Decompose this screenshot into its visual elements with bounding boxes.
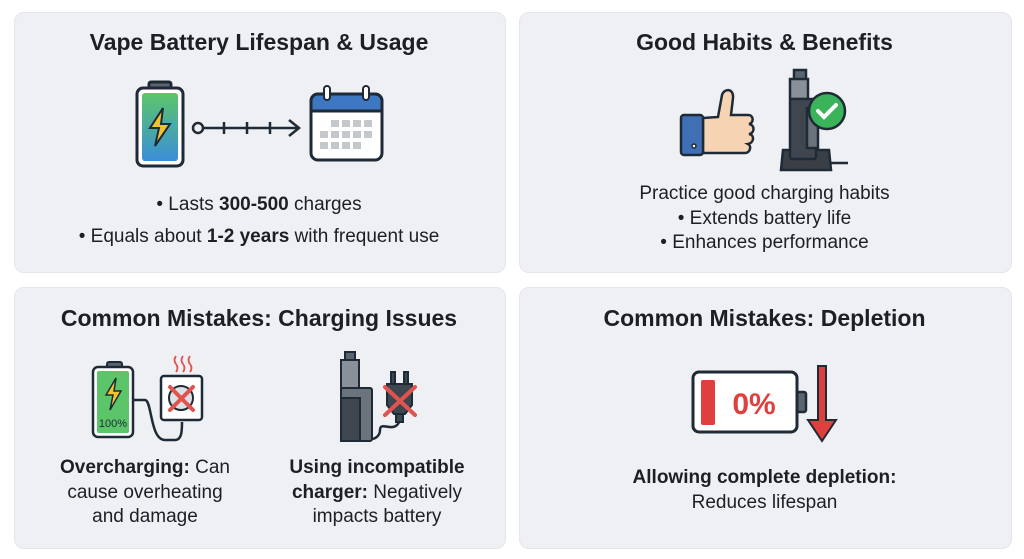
- icon: vape with incompatible plug: [341, 352, 415, 441]
- panel: charging issues: [14, 287, 506, 549]
- text: habits: • Extends battery life: [678, 208, 851, 228]
- title: lifespan: Vape Battery Lifespan & Usage: [90, 29, 428, 55]
- icon: empty battery 0%: [693, 372, 806, 432]
- text: overcharging: [60, 457, 230, 527]
- text: incompatible charger: Using incompatible: [289, 457, 465, 478]
- text: depletion: [633, 467, 896, 512]
- panel: depletion: [519, 287, 1012, 549]
- arrow: down red: [808, 366, 836, 441]
- text: habits: Practice good charging habits: [639, 183, 890, 204]
- arrow: timeline: [193, 120, 299, 136]
- panel: habits: [519, 12, 1012, 273]
- text: habits: [639, 183, 890, 253]
- title: charging: Common Mistakes: Charging Issues: [61, 305, 457, 331]
- title: habits: Good Habits & Benefits: [636, 29, 893, 55]
- icon: calendar: [311, 86, 382, 160]
- icon: vape on charging dock with check: [781, 70, 848, 170]
- text: depletion: Reduces lifespan: [692, 492, 837, 512]
- text: incompatible charger: charger: Negatively: [292, 482, 462, 502]
- icon: battery 100% with overheating outlet: 100%: [99, 418, 127, 430]
- icon: empty battery 0%: 0%: [732, 388, 776, 421]
- text: overcharging: and damage: [92, 506, 198, 527]
- title: depletion: Common Mistakes: Depletion: [603, 305, 926, 331]
- icon: battery charging: [137, 82, 183, 166]
- text: lifespan: • Lasts 300-500 charges: [156, 194, 362, 215]
- text: habits: • Enhances performance: [660, 232, 869, 253]
- text: lifespan: [79, 194, 439, 246]
- text: lifespan: • Equals about 1-2 years with frequent use: [79, 226, 439, 246]
- text: overcharging: Overcharging: Can: [60, 457, 230, 478]
- panel: lifespan: [14, 12, 506, 273]
- text: incompatible charger: [289, 457, 465, 527]
- text: overcharging: cause overheating: [67, 482, 223, 502]
- text: depletion: Allowing complete depletion:: [633, 467, 896, 488]
- icon: battery 100% with overheating outlet: [93, 356, 202, 440]
- text: incompatible charger: impacts battery: [313, 506, 441, 527]
- icon: thumbs up: [681, 90, 754, 155]
